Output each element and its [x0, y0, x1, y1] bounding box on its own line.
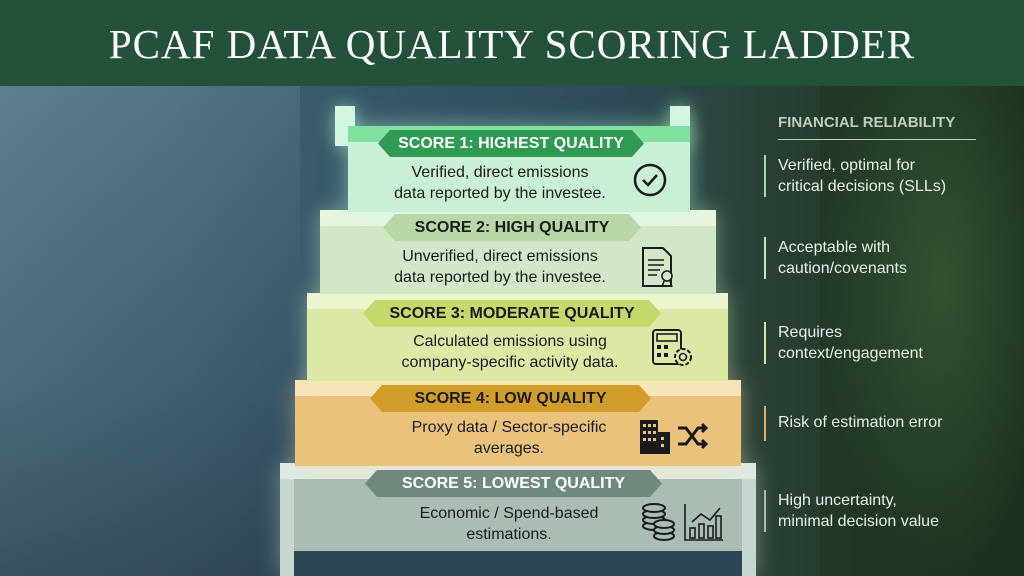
reliability 1: Verified, optimal for [778, 157, 915, 174]
icon: building shuffle [640, 420, 708, 454]
desc 1: Verified, direct emissions [412, 164, 588, 181]
desc 4: averages. [474, 440, 544, 457]
icon: coins chart [642, 503, 723, 541]
icon: check [634, 164, 666, 196]
desc 2: data reported by the investee. [394, 269, 606, 286]
desc 4 [412, 419, 606, 457]
step 4 [295, 380, 741, 466]
reliability 2 [764, 237, 907, 279]
reliability 2: Acceptable with [778, 239, 890, 256]
pill 3: SCORE 3: MODERATE QUALITY [389, 305, 635, 322]
step 5 [280, 463, 756, 576]
step 1 [348, 126, 690, 212]
desc 1: data reported by the investee. [394, 185, 606, 202]
pill 2 [383, 214, 641, 241]
desc 5: estimations. [466, 526, 552, 543]
icon: certificate [642, 247, 673, 288]
reliability 3: Requires [778, 324, 842, 341]
pill 3 [363, 300, 661, 327]
desc 2: Unverified, direct emissions [402, 248, 598, 265]
header: PCAF DATA QUALITY SCORING LADDER [109, 21, 915, 67]
desc 3 [402, 333, 618, 371]
pill 4 [370, 385, 651, 412]
desc 5: Economic / Spend-based [420, 505, 598, 522]
reliability 5 [764, 490, 939, 532]
reliability 3: context/engagement [778, 345, 923, 362]
right heading [778, 114, 976, 140]
desc 4: Proxy data / Sector-specific [412, 419, 606, 436]
reliability 4: Risk of estimation error [778, 414, 942, 431]
pill 4: SCORE 4: LOW QUALITY [414, 390, 606, 407]
right heading: FINANCIAL RELIABILITY [778, 114, 955, 131]
ladder rails [335, 106, 355, 146]
desc 3: company-specific activity data. [402, 354, 618, 371]
pill 5 [365, 470, 662, 497]
desc 1 [394, 164, 606, 202]
desc 2 [394, 248, 606, 286]
step 2 [320, 210, 716, 294]
reliability 1 [764, 155, 946, 197]
reliability 1: critical decisions (SLLs) [778, 178, 946, 195]
reliability 5: minimal decision value [778, 513, 939, 530]
pill 5: SCORE 5: LOWEST QUALITY [402, 475, 625, 492]
pill 1 [378, 130, 644, 157]
reliability 4 [764, 406, 942, 441]
pill 1: SCORE 1: HIGHEST QUALITY [398, 135, 624, 152]
desc 5 [420, 505, 598, 543]
reliability 3 [764, 322, 923, 364]
step 3 [307, 293, 728, 381]
header [0, 0, 1024, 86]
desc 3: Calculated emissions using [413, 333, 607, 350]
reliability 2: caution/covenants [778, 260, 907, 277]
icon: calculator gear [652, 329, 692, 366]
reliability 5: High uncertainty, [778, 492, 897, 509]
pill 2: SCORE 2: HIGH QUALITY [415, 219, 609, 236]
